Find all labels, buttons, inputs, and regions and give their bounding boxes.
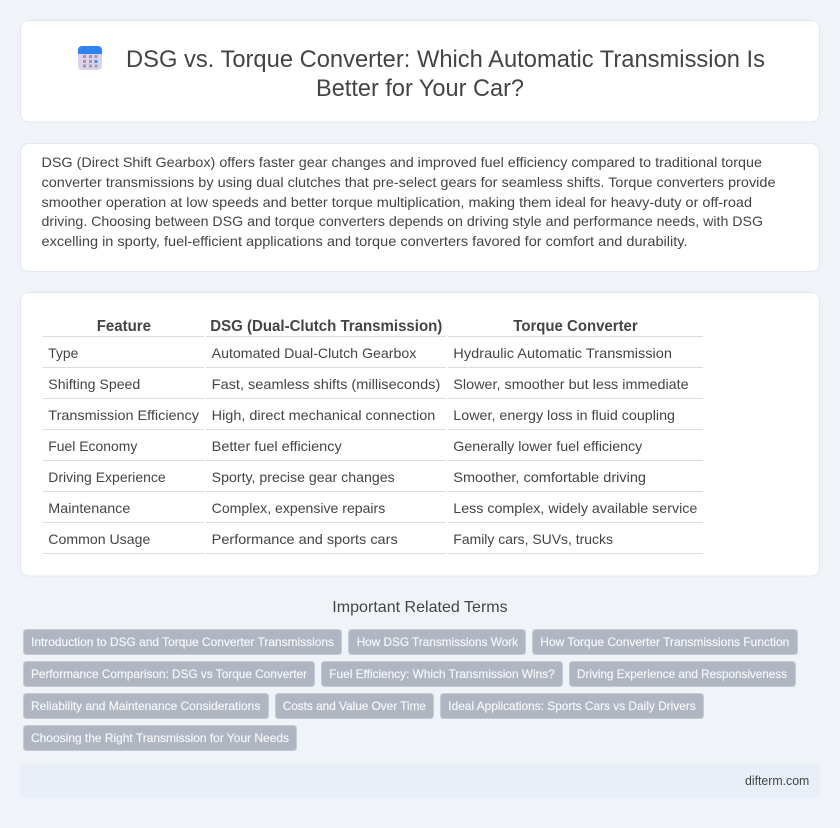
tag	[276, 694, 434, 718]
table row: shifting speed: Slower, smoother but less immediate	[453, 376, 689, 392]
table: header row: DSG (Dual-Clutch Transmission)	[210, 318, 442, 335]
panel: comparison table card	[20, 292, 820, 576]
table row: type: Type	[48, 345, 79, 361]
table: header row: Feature	[97, 318, 151, 335]
table row: shifting speed: Shifting Speed	[48, 376, 140, 392]
table row: maintenance	[48, 500, 698, 516]
table row: shifting speed: Fast, seamless shifts (milliseconds)	[212, 376, 440, 392]
text block: summary paragraph: excelling in sporty, fuel-efficient applications and torque converters favored for comfort and durability.	[42, 233, 687, 249]
tag	[24, 726, 296, 750]
text block: summary paragraph: DSG (Direct Shift Gearbox) offers faster gear changes and improved fuel efficiency compared to traditional torque	[42, 154, 762, 170]
table: header row: Torque Converter	[513, 318, 638, 335]
panel: summary card	[20, 144, 820, 272]
table row: fuel economy: Generally lower fuel efficiency	[453, 438, 642, 454]
tag	[24, 694, 268, 718]
table row: transmission efficiency	[48, 407, 675, 423]
tag: Ideal Applications: Sports Cars vs Daily Drivers	[448, 699, 696, 713]
title	[126, 46, 765, 102]
table row: transmission efficiency: High, direct mechanical connection	[212, 407, 435, 423]
table row: fuel economy: Better fuel efficiency	[212, 438, 342, 454]
table row: driving experience	[48, 469, 646, 485]
tag: Performance Comparison: DSG vs Torque Converter	[31, 667, 307, 681]
table row: common usage: Performance and sports cars	[212, 531, 398, 547]
table row: driving experience: Driving Experience	[48, 469, 166, 485]
tag: Introduction to DSG and Torque Converter Transmissions	[31, 635, 334, 649]
title: Better for Your Car?	[316, 75, 524, 102]
footer text: difterm.com: difterm.com	[745, 773, 809, 788]
text block: summary paragraph: converter transmissions by using dual clutches that pre-select gears for seamless shifts. Torque converters provide	[42, 174, 776, 190]
tag	[532, 630, 798, 654]
tag	[322, 662, 562, 686]
icon: calendar	[78, 46, 102, 70]
text block: summary paragraph: smoother operation at low speeds and better torque multiplication, making them ideal for heavy-duty or off-road	[42, 194, 752, 210]
table row: type: Hydraulic Automatic Transmission	[453, 345, 672, 361]
table row: driving experience: Sporty, precise gear changes	[212, 469, 395, 485]
table row: type	[48, 345, 672, 361]
table row: fuel economy	[48, 438, 642, 454]
tag: Driving Experience and Responsiveness	[577, 667, 787, 681]
tag: Fuel Efficiency: Which Transmission Wins?	[329, 667, 555, 681]
table row: type: Automated Dual-Clutch Gearbox	[212, 345, 416, 361]
footer bar	[20, 764, 820, 798]
text block: summary paragraph	[42, 154, 776, 249]
table row: fuel economy: Fuel Economy	[48, 438, 137, 454]
table row: common usage	[48, 531, 613, 547]
tag: How DSG Transmissions Work	[357, 635, 519, 649]
tag	[348, 630, 526, 654]
table: header row	[97, 318, 638, 335]
table row: driving experience: Smoother, comfortable driving	[453, 469, 646, 485]
heading: important related terms: Important Related Terms	[332, 599, 508, 616]
table row: maintenance: Maintenance	[48, 500, 131, 516]
table row: transmission efficiency: Transmission Efficiency	[48, 407, 199, 423]
text block: summary paragraph: driving. Choosing between DSG and torque converters depends on driving style and performance needs, with DSG	[42, 213, 763, 229]
table row: common usage: Common Usage	[48, 531, 151, 547]
tag list: related terms	[24, 630, 798, 750]
tag	[24, 662, 314, 686]
table row: maintenance: Less complex, widely available service	[453, 500, 698, 516]
title: DSG vs. Torque Converter: Which Automatic Transmission Is	[126, 46, 765, 73]
table row: common usage: Family cars, SUVs, trucks	[453, 531, 613, 547]
tag	[440, 694, 704, 718]
tag	[24, 630, 342, 654]
table row: shifting speed	[48, 376, 689, 392]
panel: title card	[20, 20, 820, 122]
table row: maintenance: Complex, expensive repairs	[212, 500, 385, 516]
table row: transmission efficiency: Lower, energy loss in fluid coupling	[453, 407, 675, 423]
tag: Reliability and Maintenance Considerations	[31, 699, 260, 713]
tag: Costs and Value Over Time	[283, 699, 426, 713]
tag: How Torque Converter Transmissions Function	[540, 635, 789, 649]
tag	[570, 662, 796, 686]
tag: Choosing the Right Transmission for Your Needs	[31, 731, 289, 745]
